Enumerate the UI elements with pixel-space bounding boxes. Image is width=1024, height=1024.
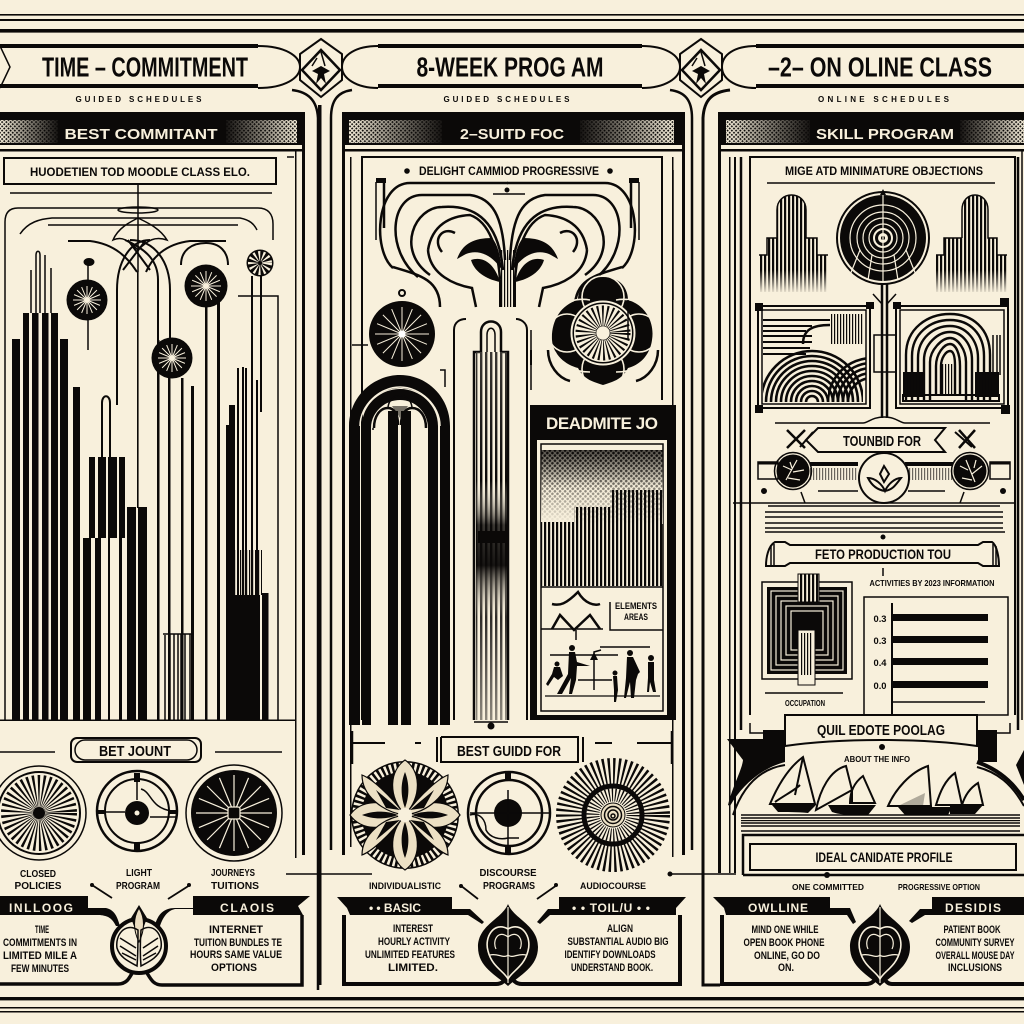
ribbon and text block: right: TUITION BUNDLES TE: [194, 937, 282, 949]
icon: sunburst medallion: [570, 772, 656, 858]
arrows to emblem: [90, 883, 191, 899]
text box: tools: • • TOIL/U • •: [572, 901, 650, 915]
heading: best guide for: BEST GUIDD FOR: [457, 743, 561, 760]
heading: deadmite: DEADMITE JO: [546, 414, 658, 433]
icon: striped tower right: [932, 195, 1010, 294]
label box: ELEMENTS: [615, 601, 657, 611]
bar chart: [864, 568, 1008, 715]
icon: right diamond ornament: [680, 39, 722, 97]
label box: [610, 601, 663, 630]
text box: design: PATIENT BOOK: [944, 924, 1001, 936]
icon: concentric arch: [349, 375, 450, 725]
banner: toured for: [775, 417, 990, 452]
dial labels: PROGRAM: [116, 881, 160, 892]
icon: nested square: [762, 574, 852, 708]
medallion labels: AUDIOCOURSE: [580, 881, 646, 892]
text box: online: ONLINE, GO DO: [754, 950, 820, 962]
ornament row: [733, 452, 1016, 503]
heading: best jount: BET JOUNT: [99, 743, 171, 760]
banner: production: [766, 542, 999, 566]
medallion labels: INDIVIDUALISTIC: [369, 881, 441, 892]
text box: basic: [337, 897, 510, 984]
text block: left: TIME: [35, 924, 49, 936]
band: suited for: [342, 112, 685, 152]
ideal candidate profile box: [743, 835, 1024, 878]
icon: nested square: OCCUPATION: [785, 699, 825, 708]
halftone sky: [541, 450, 663, 524]
ribbon and text block: right: CLAOIS: [220, 901, 274, 915]
medallion labels: PROGRAMS: [483, 881, 535, 892]
title: 8-week program: 8-WEEK PROG AM: [416, 52, 604, 82]
text box: basic: UNLIMITED FEATURES: [365, 949, 455, 961]
profile captions: [792, 882, 980, 892]
dial labels: [14, 868, 259, 892]
ribbon and text block: right: OPTIONS: [211, 962, 257, 974]
band: best commitment: BEST COMMITANT: [64, 126, 218, 143]
icon: starburst: [184, 264, 228, 308]
icon: spade emblem: [478, 904, 538, 986]
text block: left: [0, 924, 134, 984]
text box: online: [713, 897, 880, 984]
ribbon: left: [0, 896, 120, 926]
text box: tools: UNDERSTAND BOOK.: [571, 962, 653, 974]
text box: basic: • • BASIC: [369, 901, 421, 915]
panel: online class header: [722, 46, 1024, 88]
horizon rules: [741, 815, 1020, 831]
text box: design: [880, 897, 1024, 984]
banner: toured for: TOUNBID FOR: [843, 433, 921, 450]
art deco skyline chart: [0, 157, 295, 721]
sub-caption rows: [76, 95, 950, 104]
icon: starburst: [66, 280, 108, 320]
art panel: arches: [893, 298, 1010, 414]
icon: spade emblem: [850, 904, 910, 986]
icon: ray dial: [0, 766, 86, 860]
banner: [785, 715, 977, 750]
panel: online class column: [713, 112, 1024, 986]
bar chart: ACTIVITIES BY 2023 INFORMATION: [870, 578, 994, 588]
icon: leaf medallion left: [774, 452, 812, 490]
sub-caption rows: GUIDED SCHEDULES: [76, 95, 202, 104]
dial labels: CLOSED: [20, 869, 56, 880]
text box: design: INCLUSIONS: [948, 962, 1002, 974]
sub-caption rows: ONLINE SCHEDULES: [818, 95, 950, 104]
band: skill program: SKILL PROGRAM: [816, 126, 954, 143]
ribbon and text block: right: HOURS SAME VALUE: [190, 949, 282, 961]
bar chart: 0.0: [874, 681, 886, 691]
icon: petal rosette: [531, 170, 673, 390]
ships: [770, 757, 983, 815]
icon: left diamond ornament: [300, 39, 342, 97]
banner: QUIL EDOTE POOLAG: [817, 722, 945, 739]
text rules: [765, 506, 1005, 540]
inner frame and heading: MIGE ATD MINIMATURE OBJECTIONS: [785, 166, 983, 178]
profile captions: ONE COMMITTED: [792, 882, 864, 892]
text box: online: ON.: [778, 962, 794, 974]
text box: online: MIND ONE WHILE: [752, 924, 818, 936]
bottom border rules: [0, 997, 1024, 1012]
ribbon banner and ships: ABOUT THE INFO: [844, 755, 910, 764]
text box: online: OWLLINE: [748, 901, 808, 915]
text block: left: COMMITMENTS IN: [3, 937, 77, 949]
icon: leaf emblem: [111, 905, 167, 974]
icon: flower medallion: [350, 760, 460, 870]
icon: black starburst: [352, 290, 445, 387]
text box: basic: HOURLY ACTIVITY: [378, 936, 450, 948]
bar chart: 0.4: [874, 658, 886, 668]
text box: basic: INTEREST: [393, 923, 433, 935]
silhouettes: [545, 645, 660, 702]
icon: target dial: [97, 771, 177, 851]
panel: time commitment column: [0, 112, 310, 985]
inner frame and heading: [741, 150, 1022, 730]
ribbon and text block: right: [145, 896, 310, 985]
icon: starburst: [152, 338, 192, 378]
icon: striped tower left: [755, 195, 831, 294]
text box: basic: LIMITED.: [388, 962, 438, 974]
band: suited for: 2–SUITD FOC: [460, 126, 564, 143]
dial labels: JOURNEYS: [211, 868, 255, 879]
profile captions: PROGRESSIVE OPTION: [898, 882, 980, 892]
ideal candidate profile box: IDEAL CANIDATE PROFILE: [816, 849, 952, 865]
dial labels: TUITIONS: [211, 881, 259, 892]
text box: tools: IDENTIFY DOWNLOADS: [564, 949, 656, 961]
icon: black spoke wheel: [186, 765, 282, 861]
arrows to spade: [459, 883, 558, 899]
chevrons: [541, 592, 603, 640]
dial labels: POLICIES: [14, 881, 62, 892]
ribbon banner and ships: [727, 715, 1024, 815]
bar chart: 0.3: [874, 636, 886, 646]
panel: deadmite box: [530, 405, 676, 720]
panel: 8-week program header: [342, 46, 680, 88]
text block: left: FEW MINUTES: [11, 963, 69, 975]
medallion labels: DISCOURSE: [480, 868, 537, 879]
subheading frame: DELIGHT CAMMIOD PROGRESSIVE: [419, 166, 599, 178]
ribbon and text block: right: INTERNET: [209, 924, 263, 936]
panel: 8-week program column: [337, 112, 686, 986]
dial labels: LIGHT: [126, 868, 152, 879]
column dividers: [286, 90, 736, 990]
label box: AREAS: [624, 612, 648, 622]
panel: time commitment header: [0, 46, 300, 88]
icon: ringed medallion: [837, 189, 929, 284]
text box: tools: ALIGN: [607, 923, 633, 935]
icon: leaf medallion right: [952, 452, 988, 490]
top border rules: [0, 14, 1024, 33]
text box: tools: [508, 897, 686, 984]
bar chart: 0.3: [874, 614, 886, 624]
subheading frame: [362, 157, 662, 720]
subheading box: [4, 158, 276, 184]
band: best commitment: [0, 112, 305, 152]
sub-caption rows: GUIDED SCHEDULES: [444, 95, 570, 104]
heading: best guide for: [352, 731, 672, 764]
title: time commitment: TIME – COMMITMENT: [42, 52, 248, 82]
ornament: swirl fan: [376, 178, 639, 307]
text box: design: DESIDIS: [945, 901, 1001, 915]
text box: online: OPEN BOOK PHONE: [744, 937, 824, 949]
icon: target dial: [468, 772, 550, 854]
subheading box: HUODETIEN TOD MOODLE CLASS ELO.: [30, 167, 250, 179]
heading: best jount: [0, 738, 282, 762]
medallion labels: [369, 868, 646, 892]
striped skyline: [541, 490, 663, 586]
band: skill program: [718, 112, 1024, 152]
text box: tools: SUBSTANTIAL AUDIO BIG: [568, 936, 668, 948]
icon: sprout medallion: [859, 453, 909, 503]
ribbon: left: INLLOOG: [9, 901, 73, 915]
stem connector: [873, 284, 896, 418]
art panel: waves: [755, 302, 874, 413]
banner: production: FETO PRODUCTION TOU: [815, 547, 951, 562]
text block: left: LIMITED MILE A: [3, 950, 77, 962]
icon: hatched medallion: [246, 250, 274, 276]
icon: tower spire: [454, 319, 531, 730]
